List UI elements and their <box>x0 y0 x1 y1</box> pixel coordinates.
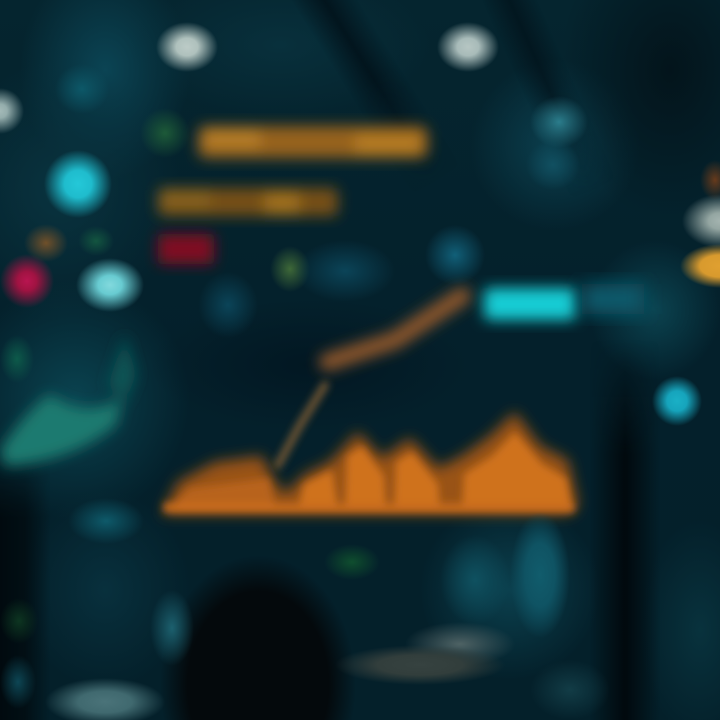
cyan highlight bar <box>484 288 576 320</box>
small green marker <box>270 246 310 292</box>
green heading marker <box>140 108 190 158</box>
dark silhouette at bottom <box>160 555 356 720</box>
chart bright inner fill with gaps <box>164 432 574 512</box>
cyan glowing dot <box>44 150 112 218</box>
orange subheading bar <box>158 188 338 216</box>
cyan dot right <box>652 376 702 426</box>
orange chart mountains <box>162 412 578 514</box>
teal area chart on left <box>0 335 136 466</box>
orange trend line <box>278 296 462 465</box>
green bottom marker <box>324 544 380 580</box>
red block <box>158 234 214 264</box>
orange heading bar <box>198 126 428 158</box>
teal extension of bar <box>582 284 644 314</box>
